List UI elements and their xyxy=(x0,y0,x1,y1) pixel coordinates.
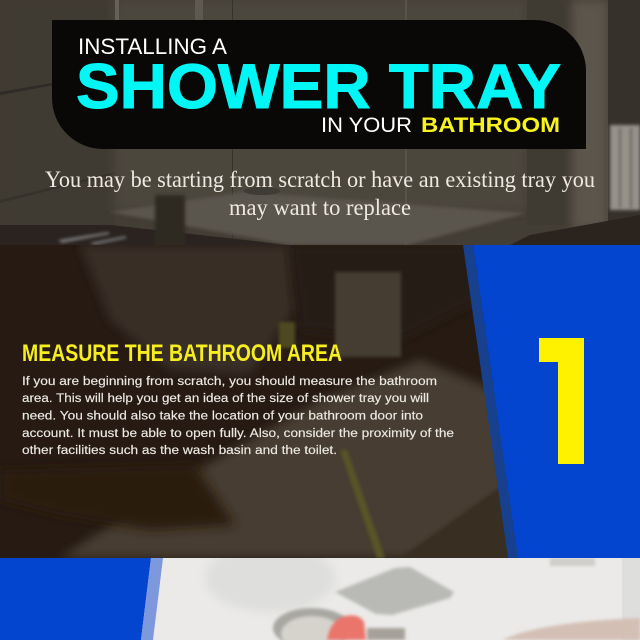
drain cover xyxy=(335,567,454,615)
step body text: If you are beginning from scratch, you should measure the bathroom xyxy=(22,376,437,388)
background photo: bathroom with shower xyxy=(0,0,640,257)
blue band with step number xyxy=(463,245,640,558)
fitting xyxy=(273,608,351,640)
title line: bathroom: BATHROOM xyxy=(421,114,560,137)
blue band, second step xyxy=(0,558,163,640)
title panel xyxy=(52,20,586,149)
red knob xyxy=(327,615,366,640)
intro text: may want to replace xyxy=(229,195,411,220)
step body text: need. You should also take the location of your bathroom door into xyxy=(22,410,423,422)
bottom section photo: shower waste fitting xyxy=(141,558,640,640)
intro text: You may be starting from scratch or have an existing tray you xyxy=(45,167,595,192)
number 1 xyxy=(539,338,584,464)
icon: radiator xyxy=(610,125,640,210)
intro text xyxy=(45,167,595,220)
title line: shower tray: SHOWER TRAY xyxy=(76,52,561,122)
step body text xyxy=(22,376,454,457)
step body text: other facilities such as the wash basin and the toilet. xyxy=(22,445,337,457)
step body text: account. It must be able to open fully. Also, consider the proximity of the xyxy=(22,428,454,440)
step body text: area. This will help you get an idea of the size of shower tray you will xyxy=(22,393,429,405)
title line: in your: IN YOUR xyxy=(321,114,412,137)
step heading: MEASURE THE BATHROOM AREA xyxy=(22,340,342,367)
title line: installing a: INSTALLING A xyxy=(78,34,227,59)
hand xyxy=(502,618,640,640)
background photo: measuring the floor xyxy=(0,245,518,558)
